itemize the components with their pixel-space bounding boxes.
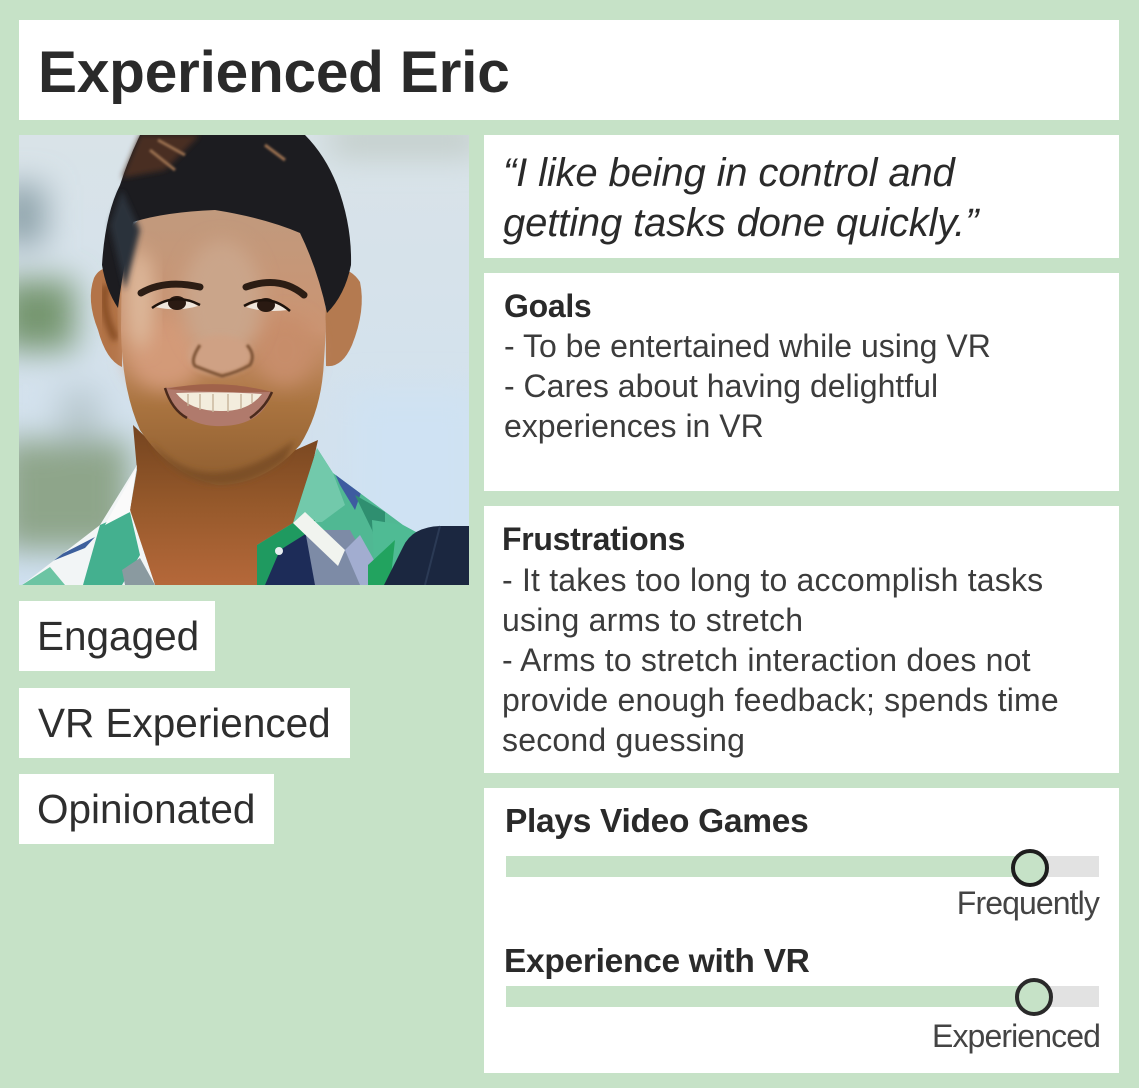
title panel <box>19 20 1119 120</box>
quote text: “I like being in control and <box>503 151 955 195</box>
ears <box>91 268 122 367</box>
nose <box>189 347 251 378</box>
tag: Engaged: Engaged <box>37 613 199 659</box>
slider: plays video games <box>506 856 1099 877</box>
label: experienced: Experienced <box>932 1018 1100 1054</box>
tag: Opinionated <box>19 774 274 844</box>
quote text: getting tasks done quickly.” <box>503 201 978 245</box>
title: Experienced Eric <box>38 40 510 105</box>
background <box>19 135 469 585</box>
frustrations text: using arms to stretch <box>502 602 803 638</box>
right shirt <box>257 448 416 585</box>
panel: experience sliders <box>484 788 1119 1073</box>
frustrations text <box>502 562 1059 758</box>
left shirt <box>22 465 155 585</box>
goals text <box>504 328 991 444</box>
goals text: - To be entertained while using VR <box>504 328 991 364</box>
portrait photo <box>19 135 469 585</box>
panel: frustrations <box>484 506 1119 773</box>
hair <box>102 135 351 313</box>
goals heading: Goals <box>504 288 591 324</box>
slider knob: plays video games <box>1011 849 1049 887</box>
tag: VR Experienced: VR Experienced <box>38 700 331 746</box>
eyes <box>156 301 198 310</box>
heading: plays video games: Plays Video Games <box>505 803 808 840</box>
frustrations text: second guessing <box>502 722 745 758</box>
slider: experience with VR <box>506 986 1099 1007</box>
frustrations text: provide enough feedback; spends time <box>502 682 1059 718</box>
goals text: experiences in VR <box>504 408 764 444</box>
face <box>121 203 326 485</box>
goals text: - Cares about having delightful <box>504 368 938 404</box>
panel: goals <box>484 273 1119 491</box>
slider knob: experience with VR <box>1015 978 1053 1016</box>
tag: VR Experienced <box>19 688 350 758</box>
neck <box>130 425 318 585</box>
frustrations text: - It takes too long to accomplish tasks <box>502 562 1043 598</box>
backpack strap <box>384 526 469 585</box>
frustrations text: - Arms to stretch interaction does not <box>502 642 1031 678</box>
tag: Opinionated: Opinionated <box>37 786 255 832</box>
quote text <box>503 151 980 245</box>
tag: Engaged <box>19 601 215 671</box>
heading: experience with VR: Experience with VR <box>504 943 810 980</box>
eyebrows <box>141 284 200 293</box>
mouth <box>165 386 272 426</box>
frustrations heading: Frustrations <box>502 521 685 557</box>
label: frequently: Frequently <box>957 885 1099 921</box>
quote panel <box>484 135 1119 258</box>
